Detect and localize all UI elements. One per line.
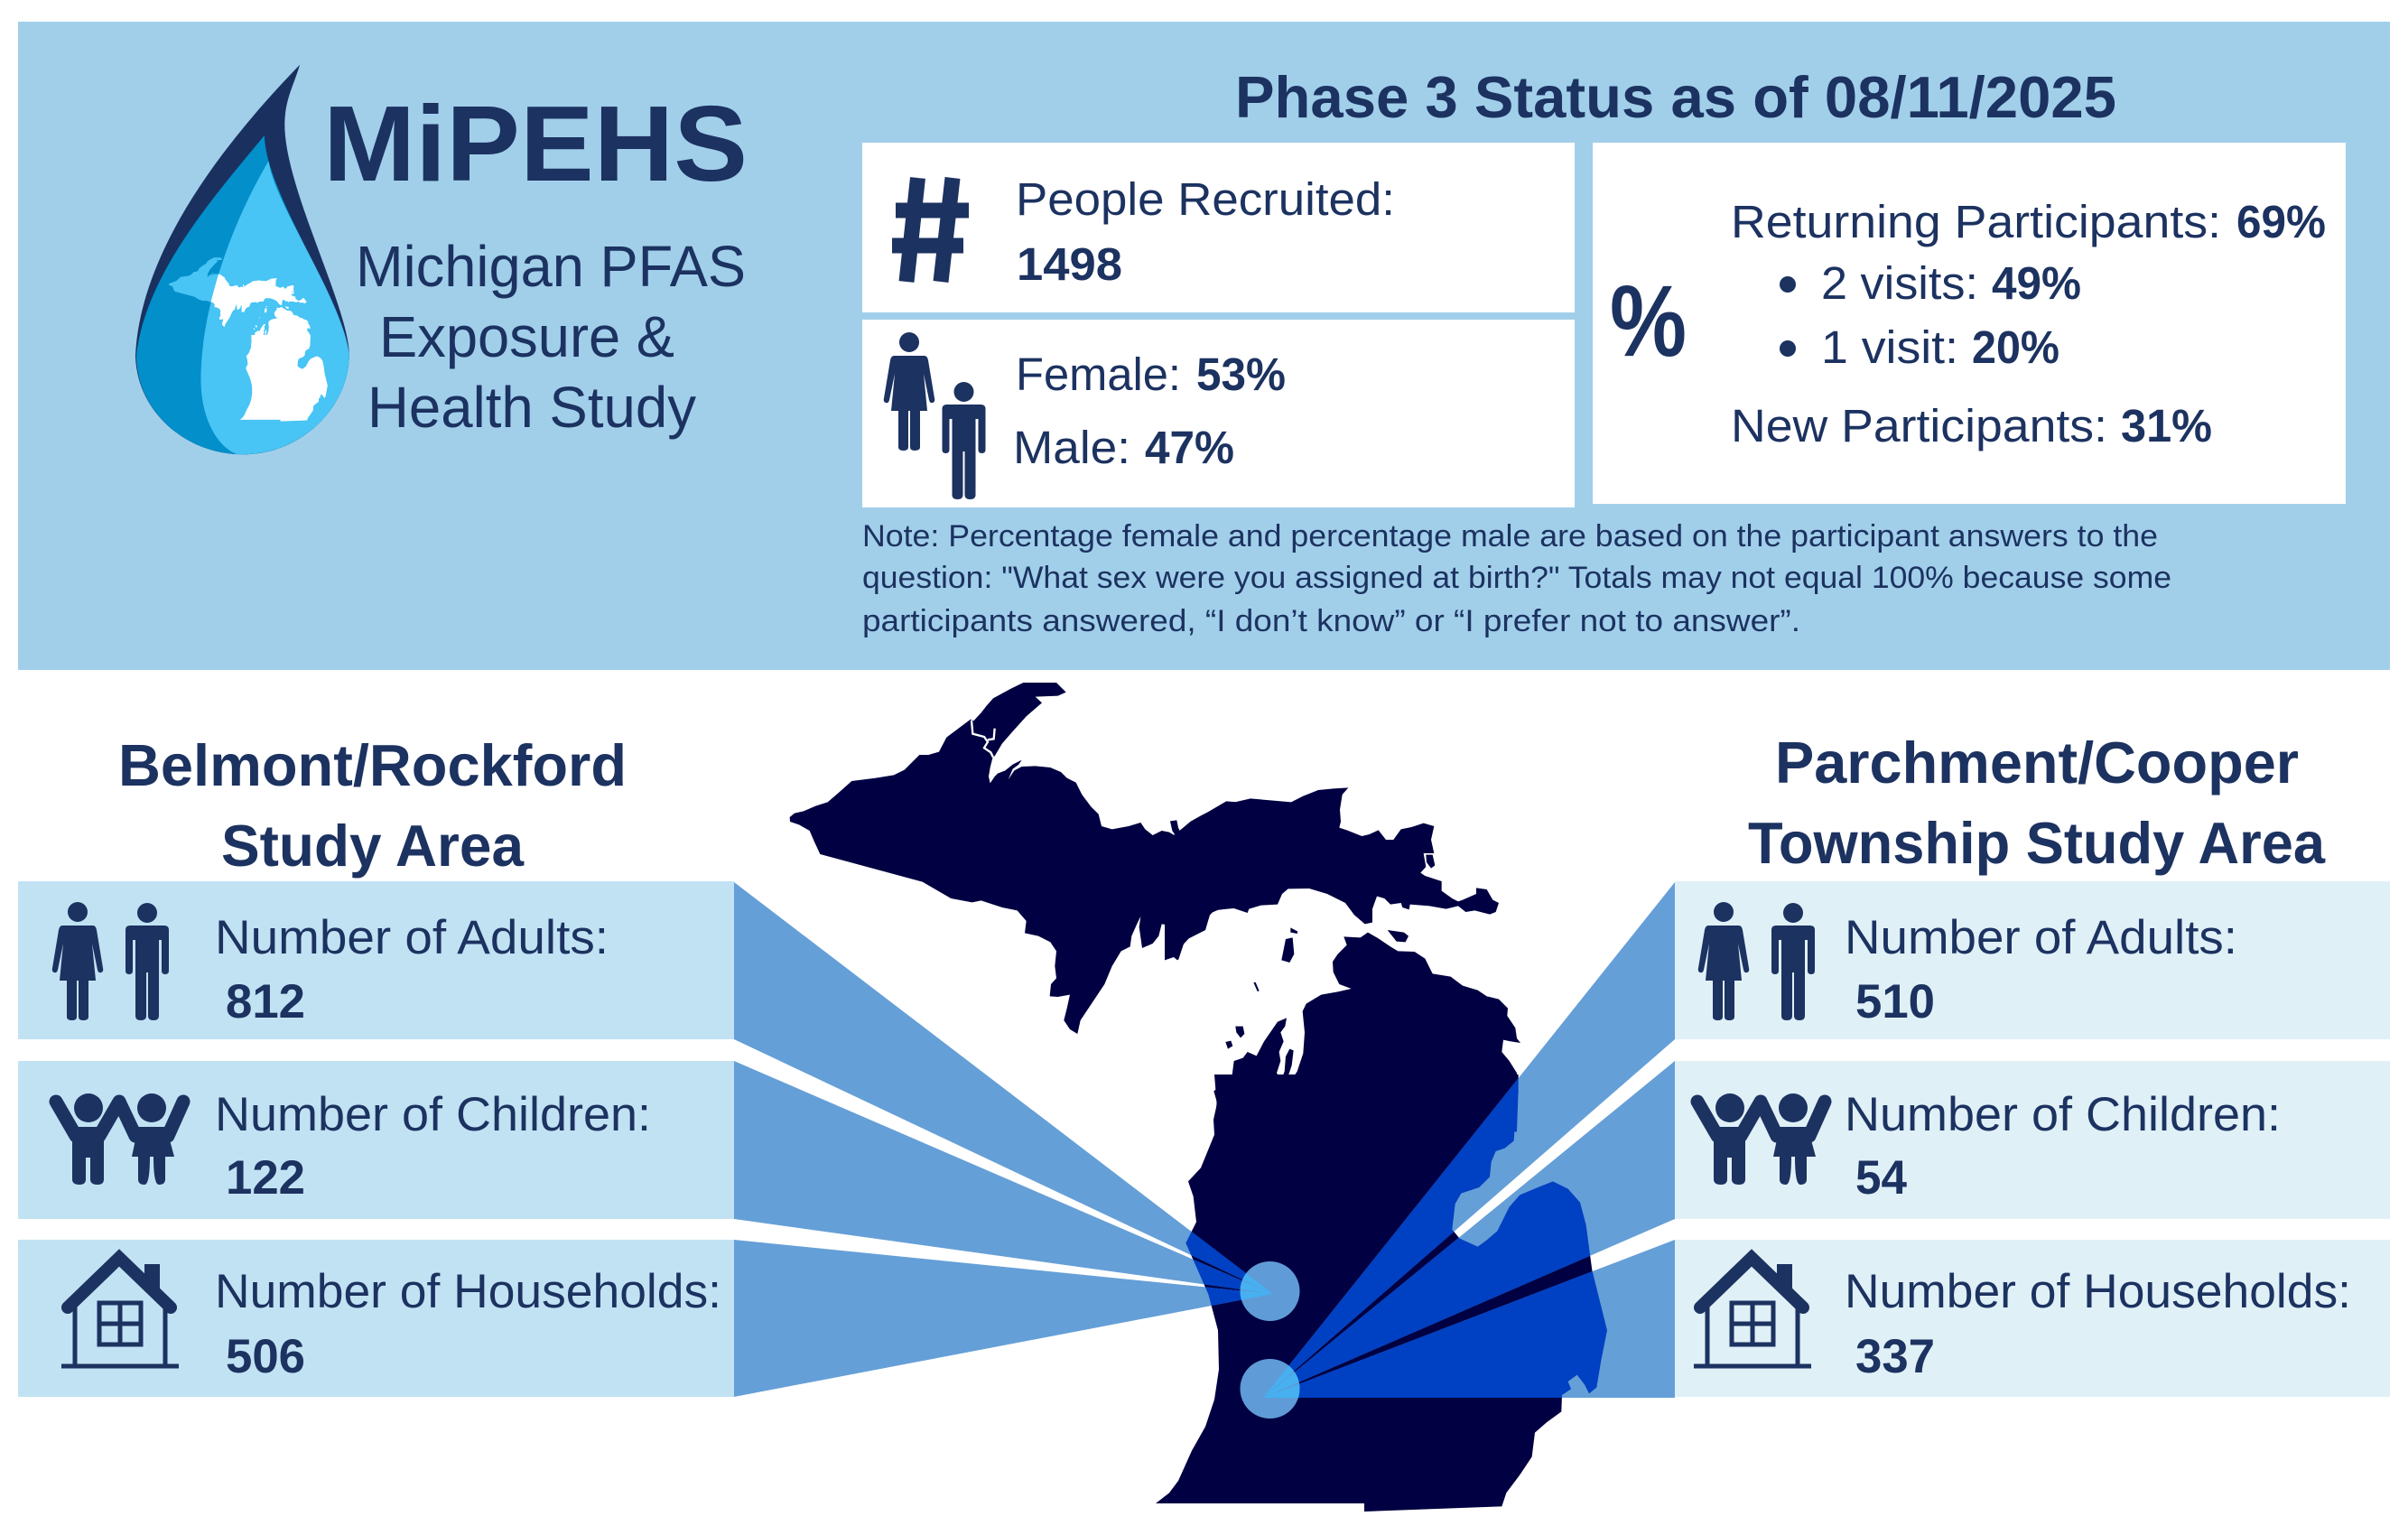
new participants: 31%	[2121, 400, 2212, 451]
icon: female and male figures	[884, 332, 986, 499]
two visits	[1780, 257, 2081, 309]
people recruited label: People Recruited:	[1016, 173, 1395, 225]
beams overlapping the map	[1185, 1078, 1607, 1398]
female percentage: 53%	[1196, 349, 1286, 400]
heading: Belmont/Rockford: Study Area	[221, 813, 525, 879]
female percentage: Female:	[1016, 349, 1181, 400]
households value: 337	[1855, 1330, 1935, 1383]
icon: adults	[1698, 902, 1815, 1020]
children value: 122	[226, 1151, 305, 1205]
panel: Belmont adults	[18, 881, 734, 1039]
marker: Parchment/Cooper location	[1241, 1359, 1300, 1419]
heading: Parchment/Cooper: Parchment/Cooper	[1775, 730, 2299, 795]
returning participants: Returning Participants:	[1731, 196, 2221, 247]
note text: Note: Percentage female and percentage male are based on the participant answers to the	[862, 519, 2158, 554]
male percentage: 47%	[1145, 422, 1234, 473]
panel: people recruited	[862, 143, 1575, 312]
one visit	[1780, 321, 2059, 373]
marker: Belmont/Rockford location	[1241, 1261, 1300, 1321]
male percentage: Male:	[1013, 422, 1130, 473]
two visits: 49%	[1992, 257, 2081, 309]
icon: water drop	[135, 65, 349, 454]
one visit: 1 visit:	[1821, 321, 1958, 373]
heading: Parchment/Cooper: Township Study Area	[1748, 810, 2326, 876]
icon: number sign	[892, 178, 969, 282]
panel: Belmont children	[18, 1061, 734, 1219]
households value: 506	[226, 1330, 305, 1383]
one visit: 20%	[1972, 321, 2059, 373]
header panel background	[18, 22, 2390, 670]
logo wordmark: MiPEHS	[323, 84, 748, 204]
heading: phase 3 status: Phase 3 Status as of 08/11/2025	[1235, 64, 2116, 130]
male percentage	[1013, 422, 1234, 473]
households label: Number of Households:	[1845, 1265, 2351, 1318]
logo subtitle: Michigan PFAS	[356, 234, 746, 299]
panel: returning and new participants	[1593, 143, 2346, 504]
children label: Number of Children:	[1845, 1088, 2281, 1141]
heading: Belmont/Rockford: Belmont/Rockford	[118, 732, 627, 798]
panel: Parchment children	[1675, 1061, 2390, 1219]
heading: Belmont/Rockford	[118, 732, 627, 879]
heading: Parchment/Cooper	[1748, 730, 2326, 876]
adults label: Number of Adults:	[1845, 911, 2237, 964]
panel: Parchment adults	[1675, 881, 2390, 1039]
note text	[862, 519, 2171, 638]
map of Michigan	[790, 683, 1607, 1512]
icon: children	[56, 1093, 183, 1185]
icon: children	[1697, 1093, 1825, 1185]
logo subtitle: Health Study	[367, 375, 696, 440]
panel: Parchment households	[1675, 1240, 2390, 1397]
people recruited value: 1498	[1017, 238, 1122, 290]
children value: 54	[1855, 1151, 1908, 1205]
panel: sex breakdown	[862, 320, 1575, 507]
panel: Belmont households	[18, 1240, 734, 1397]
two visits: 2 visits:	[1821, 257, 1978, 309]
beams: Parchment/Cooper connectors	[1263, 882, 1675, 1398]
adults value: 812	[226, 975, 305, 1028]
note text: question: "What sex were you assigned at birth?" Totals may not equal 100% because some	[862, 561, 2171, 595]
icon: house	[61, 1258, 179, 1366]
icon: percent sign: %	[1610, 265, 1687, 377]
logo subtitle	[356, 234, 746, 440]
icon: house	[1694, 1258, 1811, 1366]
beams: Belmont/Rockford connectors	[734, 882, 1273, 1397]
adults value: 510	[1855, 975, 1935, 1028]
new participants: New Participants:	[1731, 400, 2107, 451]
icon: adults	[52, 902, 169, 1020]
note text: participants answered, “I don’t know” or “I prefer not to answer”.	[862, 604, 1800, 638]
children label: Number of Children:	[215, 1088, 651, 1141]
logo: MiPEHS water drop with Michigan	[135, 65, 748, 454]
logo subtitle: Exposure &	[379, 304, 674, 369]
returning participants: 69%	[2236, 196, 2326, 247]
adults label: Number of Adults:	[215, 911, 609, 964]
female percentage	[1016, 349, 1286, 400]
households label: Number of Households:	[215, 1265, 721, 1318]
